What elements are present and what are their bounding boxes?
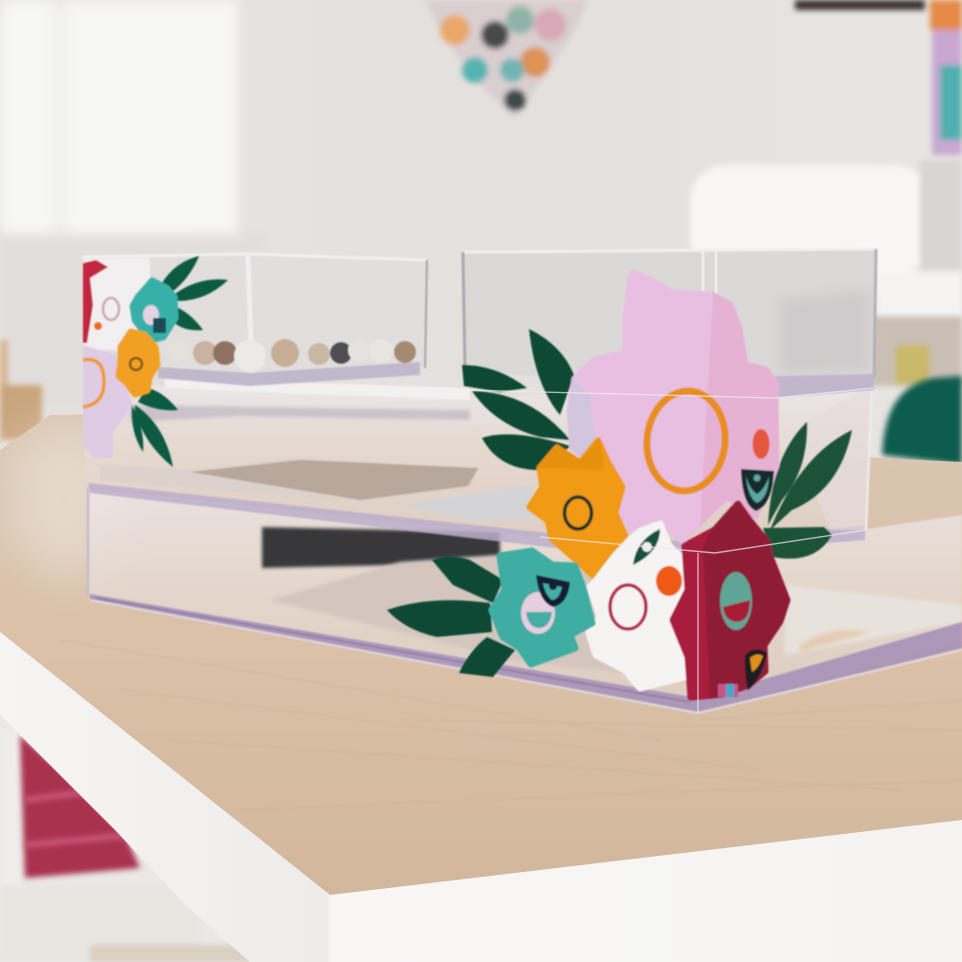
lavender petal [83,345,133,458]
pink big petal [570,273,776,540]
background: blurred window [0,0,265,411]
white flower [589,524,685,688]
background: cardboard box [0,340,42,440]
desk top in wood [0,410,962,895]
tray bottom: large acrylic tray [88,488,962,713]
crimson flower [673,504,787,697]
teal flower [492,551,592,664]
small eye on white flower [633,529,660,565]
orange ring [83,359,104,407]
left decal: floral corner [83,256,228,467]
teal flower [133,281,175,340]
tray top left: small acrylic tray with beads [82,254,427,386]
desk washed highlight at far left [8,425,130,590]
white petal [83,258,150,350]
dark leaves upper left [529,329,574,415]
orange flower [530,441,625,575]
dark leaves right [768,422,807,525]
tray top right: small acrylic tray [463,249,876,398]
right decal: large floral corner [387,273,852,698]
lavender translucent overlap [567,377,595,460]
purple tray floor band [90,594,962,713]
background: blurred wall art [425,0,588,118]
beads [167,338,416,372]
desk front edge in white [0,632,962,962]
desk wood grain [60,640,962,810]
tray rims over decal [463,388,874,713]
background: green velvet chair [882,376,962,465]
leaves [162,256,199,292]
dark items inside bottom tray [262,527,500,568]
tray middle: large acrylic tray [84,378,872,558]
orange ring [642,387,730,495]
eye motif [741,469,774,511]
area below desk: shelf with pink bins [0,700,340,962]
red dot [752,429,770,459]
background: top right corner art and shelf [690,0,962,386]
orange flower [119,332,157,394]
crimson petal [83,260,108,343]
green leaves lower left [432,556,503,603]
